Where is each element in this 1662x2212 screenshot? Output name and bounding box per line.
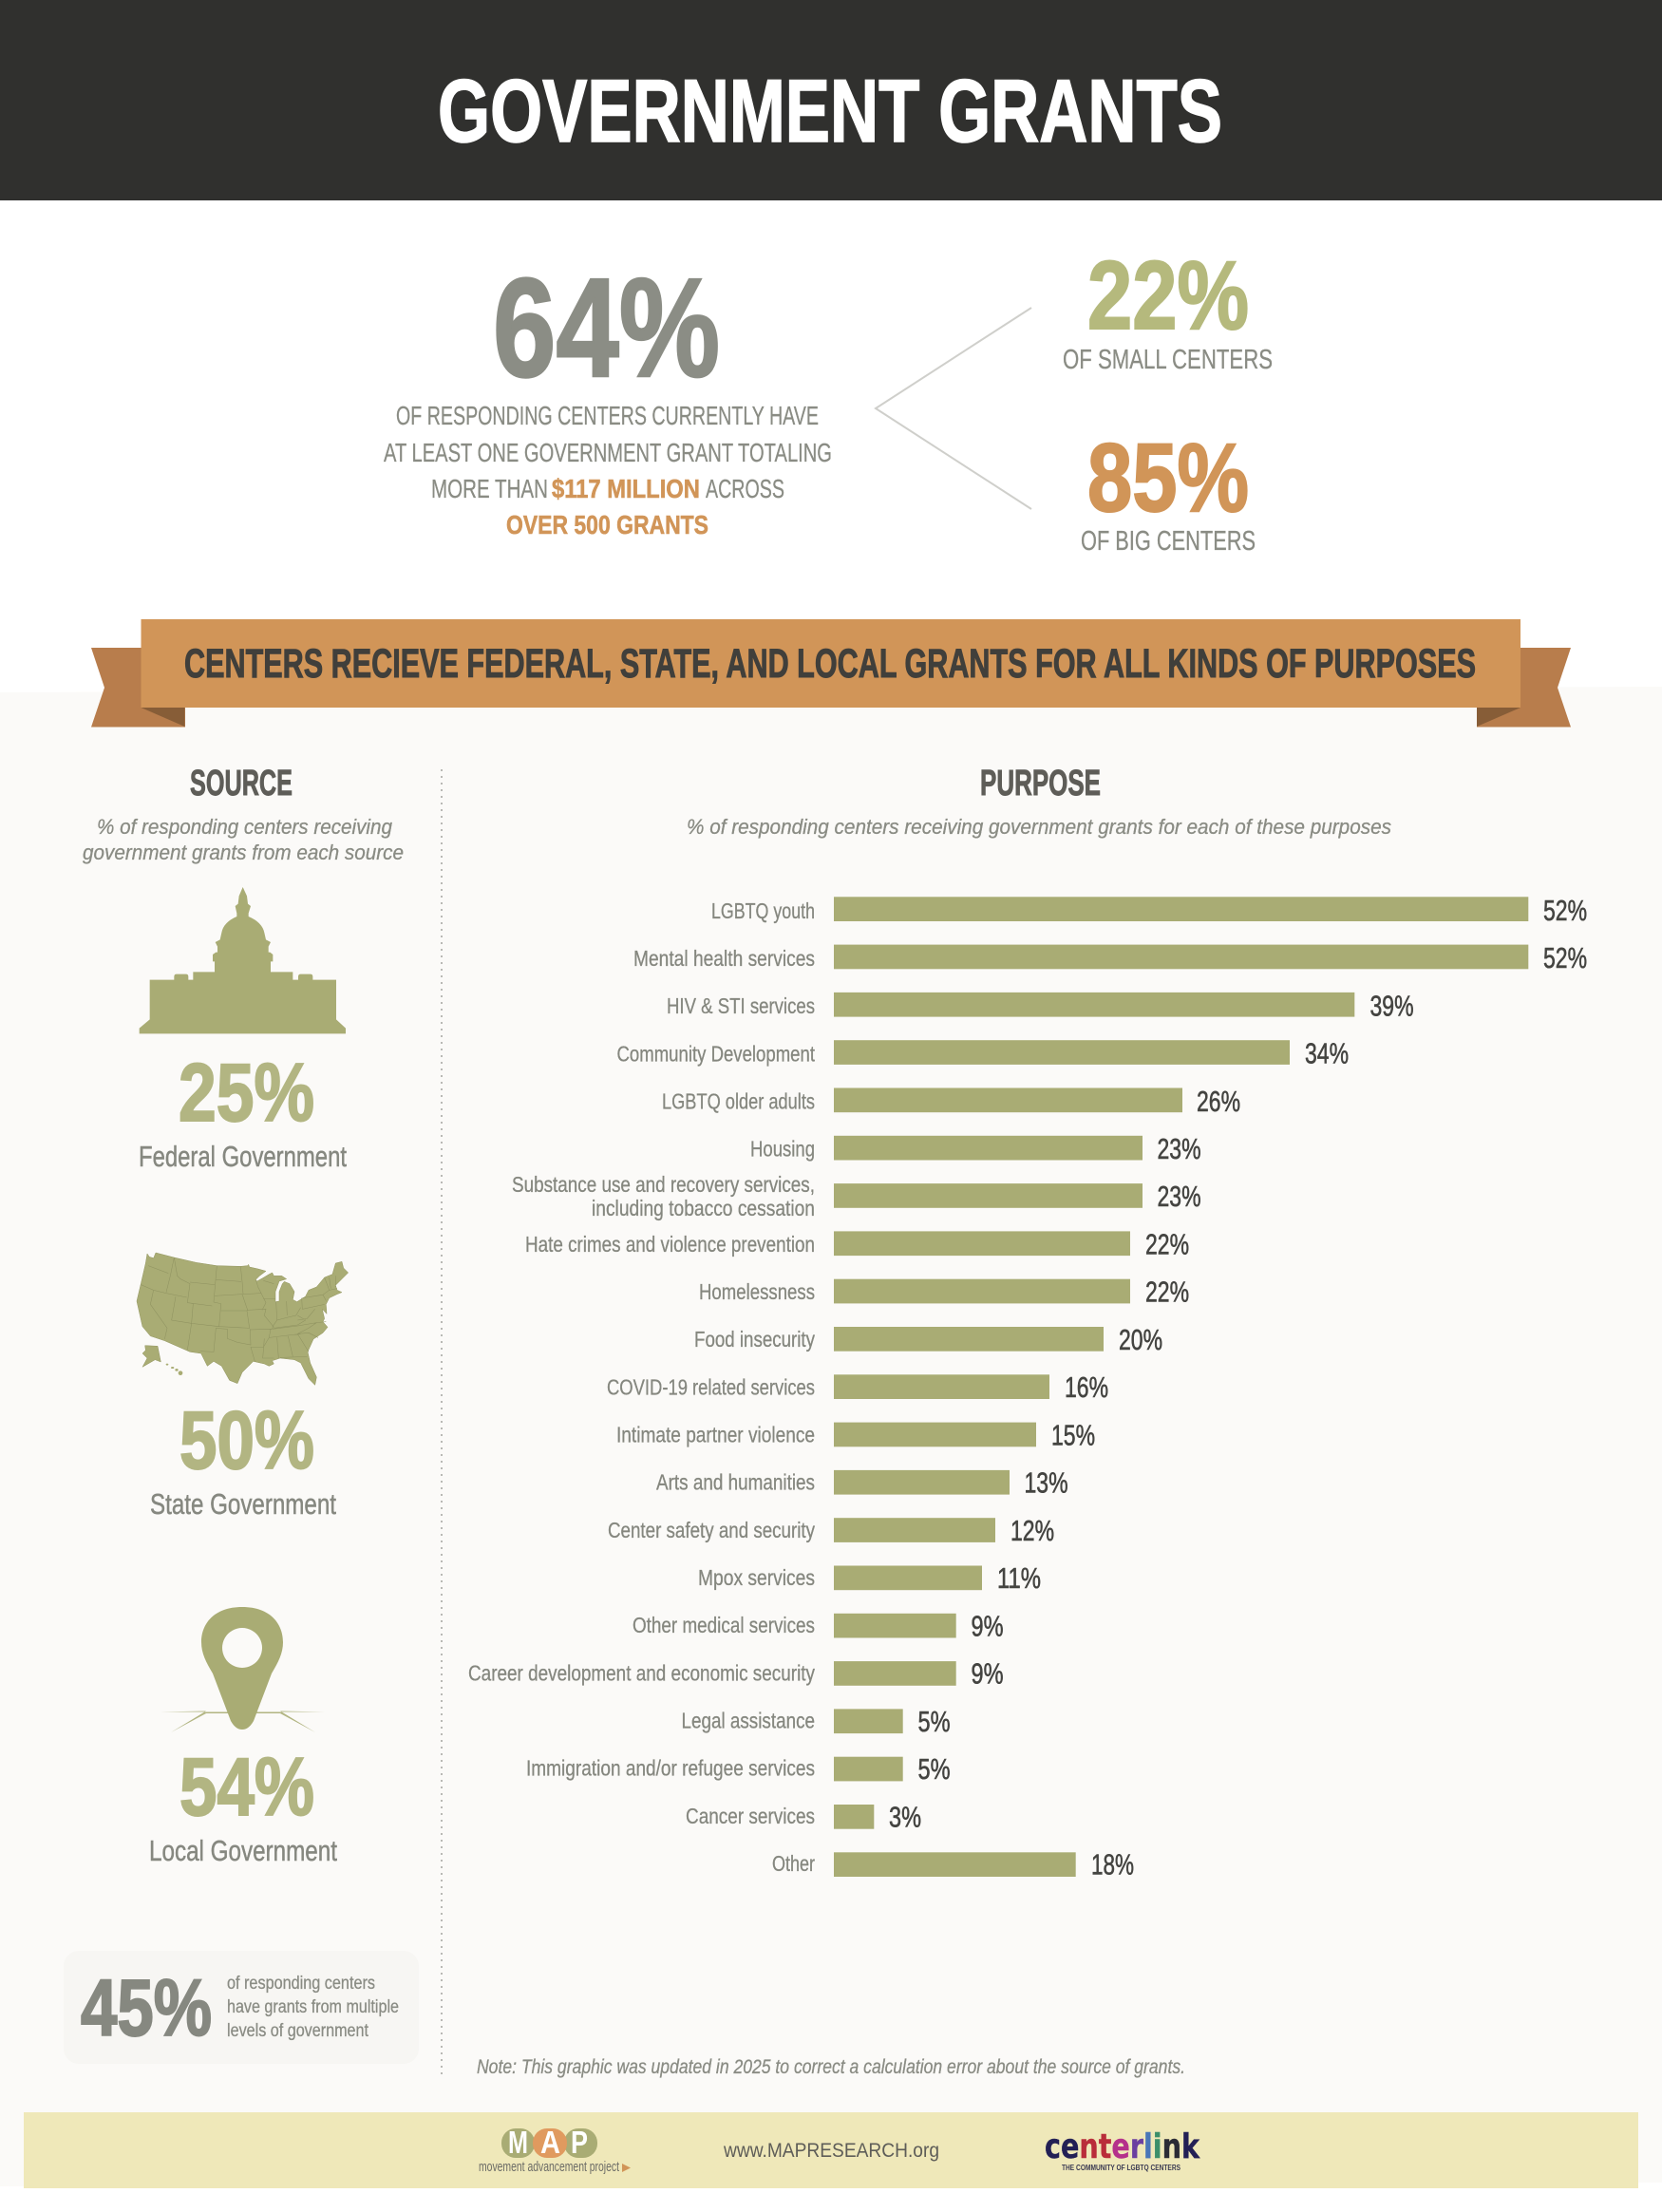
- logo: MAP: P: [571, 2125, 588, 2160]
- row: Arts and humanities: Arts and humanities: [656, 1470, 815, 1495]
- stat: big centers 85%: OF BIG CENTERS: [1081, 526, 1256, 557]
- row: Hate crimes and violence prevention: 22%: [1145, 1227, 1189, 1261]
- source heading and subtitle: government grants from each source: [83, 841, 404, 864]
- row: Homelessness: Homelessness: [699, 1279, 815, 1304]
- header band with title: GOVERNMENT GRANTS: [438, 61, 1222, 161]
- row: Career development and economic security: Career development and economic security: [468, 1660, 815, 1685]
- logo: MAP: M: [508, 2125, 528, 2160]
- panel: headline statistic 64%: ACROSS: [706, 474, 784, 503]
- stat: local government 54%: Local Government: [149, 1834, 337, 1867]
- row: Other: [772, 1848, 1134, 1881]
- row: Substance use and recovery services: [512, 1172, 1200, 1220]
- callout: 45% multiple levels: 45%: [81, 1963, 212, 2052]
- stat: federal government 25%: [139, 1048, 347, 1173]
- bar chart: grant purposes: [468, 894, 1587, 1881]
- row: Homelessness: 22%: [1145, 1276, 1189, 1309]
- callout: 45% multiple levels: levels of government: [227, 2021, 369, 2041]
- logo: MAP: [479, 2125, 631, 2175]
- row: Mental health services: 52%: [1543, 941, 1587, 974]
- purpose heading and subtitle: PURPOSE: [980, 764, 1101, 804]
- row: LGBTQ youth: [711, 894, 1587, 927]
- note: Note: This graphic was updated in 2025 to correct a calculation error about the source of grants.: [477, 2056, 1185, 2078]
- row: LGBTQ older adults: [662, 1085, 1240, 1118]
- row: Legal assistance: 5%: [917, 1705, 950, 1738]
- row: Mpox services: 11%: [997, 1561, 1041, 1595]
- row: Substance use and recovery services: Substance use and recovery services,: [512, 1172, 815, 1197]
- footer band: [24, 2112, 1638, 2188]
- row: Other: 18%: [1091, 1848, 1134, 1881]
- website address: www.MAPRESEARCH.org: [723, 2140, 939, 2162]
- row: Food insecurity: 20%: [1119, 1323, 1162, 1356]
- stat: big centers 85%: 85%: [1087, 424, 1249, 532]
- callout: 45% multiple levels: have grants from multiple: [227, 1997, 399, 2017]
- panel: headline statistic 64%: 64%: [493, 250, 720, 406]
- row: COVID-19 related services: COVID-19 related services: [607, 1374, 815, 1399]
- row: Other medical services: 9%: [971, 1609, 1003, 1642]
- logo: MAP: A: [540, 2125, 560, 2160]
- stat: local government 54%: 54%: [179, 1742, 314, 1833]
- row: Mpox services: Mpox services: [698, 1565, 815, 1590]
- row: Community Development: [617, 1037, 1349, 1069]
- row: Other medical services: [633, 1609, 1003, 1642]
- row: COVID-19 related services: 16%: [1065, 1371, 1108, 1404]
- row: Mental health services: [633, 941, 1587, 974]
- source heading and subtitle: % of responding centers receiving: [97, 815, 393, 839]
- stat: local government 54%: [149, 1742, 337, 1867]
- row: LGBTQ older adults: 26%: [1197, 1085, 1240, 1118]
- row: Immigration and/or refugee services: Immigration and/or refugee services: [526, 1756, 815, 1781]
- row: COVID-19 related services: [607, 1371, 1108, 1404]
- row: Hate crimes and violence prevention: [525, 1227, 1189, 1261]
- row: LGBTQ youth: 52%: [1543, 894, 1587, 927]
- source heading and subtitle: SOURCE: [190, 764, 293, 804]
- row: Intimate partner violence: 15%: [1051, 1418, 1095, 1451]
- row: Center safety and security: [608, 1514, 1054, 1547]
- row: Immigration and/or refugee services: 5%: [917, 1752, 950, 1786]
- icon: map of the United States: [137, 1253, 349, 1385]
- row: Mental health services: Mental health services: [633, 946, 815, 971]
- panel: headline statistic 64%: AT LEAST ONE GOVERNMENT GRANT TOTALING: [384, 438, 832, 467]
- row: LGBTQ youth: LGBTQ youth: [711, 898, 815, 923]
- header band with title: [0, 0, 1662, 200]
- row: Housing: [750, 1132, 1200, 1165]
- source heading and subtitle: [83, 764, 404, 864]
- panel: headline statistic 64%: $117 MILLION: [552, 474, 700, 503]
- row: Housing: 23%: [1157, 1132, 1200, 1165]
- row: Housing: Housing: [750, 1137, 815, 1162]
- row: Arts and humanities: 13%: [1024, 1466, 1067, 1500]
- row: Legal assistance: Legal assistance: [682, 1708, 815, 1732]
- row: Cancer services: Cancer services: [686, 1804, 815, 1828]
- arrow: chevron linking to small and big centers: [876, 308, 1031, 509]
- purpose heading and subtitle: [687, 764, 1391, 839]
- row: Substance use and recovery services: including tobacco cessation: [592, 1196, 815, 1220]
- stat: state government 50%: [150, 1395, 336, 1521]
- stat: small centers 22%: 22%: [1087, 241, 1249, 350]
- row: Immigration and/or refugee services: [526, 1752, 950, 1786]
- row: Cancer services: [686, 1800, 921, 1833]
- row: Intimate partner violence: [616, 1418, 1095, 1451]
- callout: 45% multiple levels: of responding centers: [227, 1974, 375, 1994]
- row: Career development and economic security: [468, 1657, 1003, 1691]
- row: Other: Other: [772, 1851, 815, 1876]
- row: Substance use and recovery services: 23%: [1157, 1180, 1200, 1213]
- panel: headline statistic 64%: OF RESPONDING CENTERS CURRENTLY HAVE: [396, 401, 819, 430]
- row: Community Development: Community Development: [617, 1041, 815, 1066]
- row: Career development and economic security: 9%: [971, 1657, 1003, 1691]
- stat: small centers 22%: OF SMALL CENTERS: [1063, 345, 1273, 375]
- row: Food insecurity: Food insecurity: [694, 1327, 815, 1352]
- row: HIV and STI services: 39%: [1369, 989, 1413, 1022]
- panel: headline statistic 64%: [384, 250, 832, 539]
- stat: big centers 85%: [1081, 424, 1256, 557]
- row: Homelessness: [699, 1276, 1189, 1309]
- row: LGBTQ older adults: LGBTQ older adults: [662, 1088, 815, 1113]
- icon: capitol building: [140, 887, 346, 1033]
- row: Legal assistance: [682, 1705, 950, 1738]
- stat: state government 50%: State Government: [150, 1487, 336, 1521]
- row: Other medical services: Other medical services: [633, 1613, 815, 1637]
- row: Community Development: 34%: [1305, 1037, 1349, 1069]
- row: HIV and STI services: [667, 989, 1413, 1022]
- logo: MAP: movement advancement project: [479, 2159, 620, 2175]
- row: Cancer services: 3%: [889, 1800, 921, 1833]
- row: Intimate partner violence: Intimate partner violence: [616, 1423, 815, 1447]
- row: Mpox services: [698, 1561, 1041, 1595]
- row: Hate crimes and violence prevention: Hate crimes and violence prevention: [525, 1232, 815, 1257]
- callout: 45% multiple levels: [64, 1951, 419, 2064]
- row: Center safety and security: Center safety and security: [608, 1518, 815, 1542]
- logo: centerlink: centerlink: [1045, 2127, 1200, 2166]
- purpose heading and subtitle: % of responding centers receiving government grants for each of these purposes: [687, 815, 1391, 839]
- banner ribbon with heading: [91, 619, 1571, 728]
- row: HIV and STI services: HIV & STI services: [667, 993, 815, 1018]
- row: Arts and humanities: [656, 1466, 1067, 1500]
- panel: headline statistic 64%: MORE THAN: [431, 474, 548, 503]
- stat: small centers 22%: [1063, 241, 1273, 375]
- stat: federal government 25%: Federal Government: [139, 1140, 347, 1173]
- panel: headline statistic 64%: OVER 500 GRANTS: [506, 510, 708, 539]
- row: Food insecurity: [694, 1323, 1162, 1356]
- row: Center safety and security: 12%: [1010, 1514, 1054, 1547]
- stat: state government 50%: 50%: [179, 1395, 314, 1486]
- stat: federal government 25%: 25%: [179, 1048, 314, 1139]
- icon: location pin: [161, 1607, 325, 1732]
- logo: centerlink: THE COMMUNITY OF LGBTQ CENTERS: [1062, 2164, 1181, 2172]
